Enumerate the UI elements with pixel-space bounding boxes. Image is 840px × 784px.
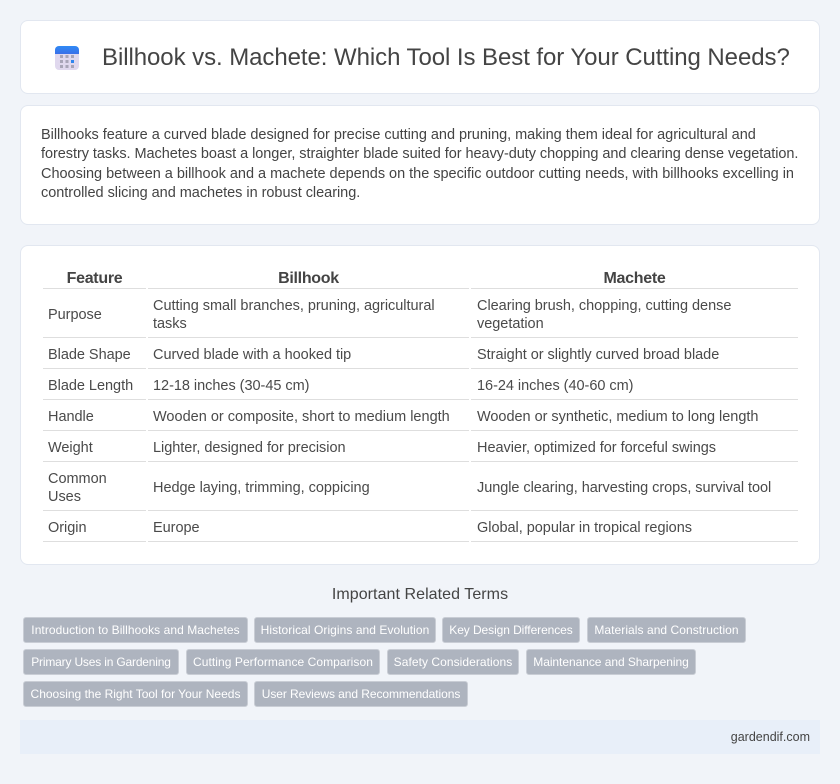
comparison table: Hedge laying, trimming, coppicing (153, 480, 370, 496)
comparison table: Billhook (278, 270, 339, 287)
comparison table: Heavier, optimized for forceful swings (477, 440, 716, 456)
comparison table: Jungle clearing, harvesting crops, survival tool (477, 480, 771, 496)
comparison table: Blade Shape (48, 347, 131, 363)
comparison table: Uses (48, 489, 81, 505)
related term tags: User Reviews and Recommendations (262, 687, 460, 701)
related term tags: Choosing the Right Tool for Your Needs (31, 687, 240, 701)
intro text (41, 127, 798, 201)
table panel (20, 245, 820, 565)
intro text: controlled slicing and machetes in robust clearing. (41, 185, 360, 201)
related terms heading: Important Related Terms (332, 586, 508, 603)
comparison table: Common (48, 471, 107, 487)
related term tags: Historical Origins and Evolution (261, 623, 429, 637)
intro text: Choosing between a billhook and a machete depends on the specific outdoor cutting needs, with billhooks excelling in (41, 166, 794, 182)
icon: calendar (55, 46, 79, 70)
related term tags (23, 617, 746, 707)
related term tags: Materials and Construction (594, 623, 739, 637)
comparison table: Straight or slightly curved broad blade (477, 347, 719, 363)
title panel (20, 20, 820, 94)
footer bar (20, 720, 820, 754)
related term tags: Primary Uses in Gardening (31, 655, 171, 669)
comparison table: Blade Length (48, 378, 133, 394)
comparison table: Clearing brush, chopping, cutting dense (477, 298, 731, 314)
comparison table: Feature (67, 270, 122, 287)
comparison table: Handle (48, 409, 94, 425)
comparison table: vegetation (477, 316, 544, 332)
intro text: Billhooks feature a curved blade designed for precise cutting and pruning, making them ideal for agricultural and (41, 127, 756, 143)
comparison table: 12-18 inches (30-45 cm) (153, 378, 309, 394)
comparison table: Machete (604, 270, 665, 287)
comparison table: Wooden or synthetic, medium to long length (477, 409, 758, 425)
intro text: forestry tasks. Machetes boast a longer, straighter blade suited for heavy-duty chopping and clearing dense vegetation. (41, 146, 798, 162)
related term tags: Cutting Performance Comparison (193, 655, 373, 669)
comparison table: Cutting small branches, pruning, agricultural (153, 298, 435, 314)
title: Billhook vs. Machete: Which Tool Is Best for Your Cutting Needs? (102, 44, 790, 71)
comparison table: Curved blade with a hooked tip (153, 347, 351, 363)
related term tags: Maintenance and Sharpening (533, 655, 689, 669)
comparison table: 16-24 inches (40-60 cm) (477, 378, 633, 394)
related term tags: Safety Considerations (394, 655, 512, 669)
comparison table: Purpose (48, 307, 102, 323)
related term tags: Introduction to Billhooks and Machetes (31, 623, 240, 637)
comparison table: tasks (153, 316, 187, 332)
footer site name: gardendif.com (731, 730, 810, 744)
comparison table: Origin (48, 520, 86, 536)
comparison table: Weight (48, 440, 93, 456)
comparison table: Europe (153, 520, 200, 536)
related term tags: Key Design Differences (449, 623, 573, 637)
comparison table (43, 270, 798, 542)
comparison table: Wooden or composite, short to medium length (153, 409, 450, 425)
comparison table: Lighter, designed for precision (153, 440, 346, 456)
intro panel (20, 105, 820, 225)
comparison table: Global, popular in tropical regions (477, 520, 692, 536)
